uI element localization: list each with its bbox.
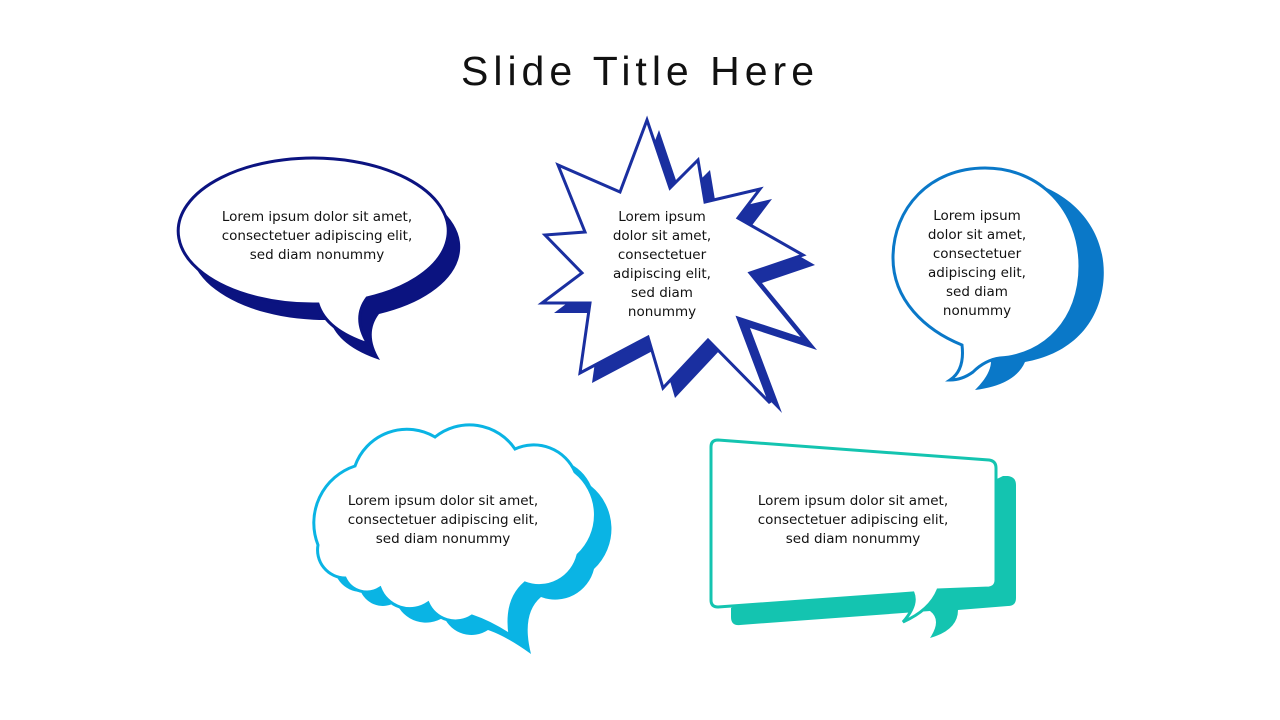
text: starburst: adipiscing elit, [613, 266, 711, 282]
text: round bubble [928, 208, 1026, 319]
panel: rectangle speech bubble [711, 440, 1016, 638]
text: rectangle bubble: consectetuer adipiscing elit, [758, 512, 948, 528]
text: rectangle bubble [758, 493, 948, 547]
text: cloud bubble: consectetuer adipiscing elit, [348, 512, 538, 528]
text: oval bubble: consectetuer adipiscing elit, [222, 228, 412, 244]
text: round bubble: adipiscing elit, [928, 265, 1026, 281]
text: cloud bubble [348, 493, 538, 547]
text: cloud bubble: sed diam nonummy [376, 531, 510, 547]
text: oval bubble [222, 209, 412, 263]
text: round bubble: dolor sit amet, [928, 227, 1026, 243]
text: round bubble: sed diam [946, 284, 1008, 300]
panel: cloud bubble [314, 425, 611, 654]
text: round bubble: nonummy [943, 303, 1011, 319]
title: Slide Title Here [461, 48, 819, 94]
panel: round speech bubble [893, 168, 1104, 390]
text: round bubble: consectetuer [933, 246, 1022, 262]
text: starburst: nonummy [628, 304, 696, 320]
text: starburst: Lorem ipsum [618, 209, 706, 225]
text: starburst [613, 209, 711, 320]
text: oval bubble: sed diam nonummy [250, 247, 384, 263]
text: starburst: dolor sit amet, [613, 228, 711, 244]
text: starburst: sed diam [631, 285, 693, 301]
text: rectangle bubble: sed diam nonummy [786, 531, 920, 547]
text: starburst: consectetuer [618, 247, 707, 263]
panel: oval speech bubble [178, 158, 460, 360]
text: round bubble: Lorem ipsum [933, 208, 1021, 224]
panel: starburst [542, 120, 817, 413]
text: cloud bubble: Lorem ipsum dolor sit amet, [348, 493, 538, 509]
text: rectangle bubble: Lorem ipsum dolor sit amet, [758, 493, 948, 509]
text: oval bubble: Lorem ipsum dolor sit amet, [222, 209, 412, 225]
